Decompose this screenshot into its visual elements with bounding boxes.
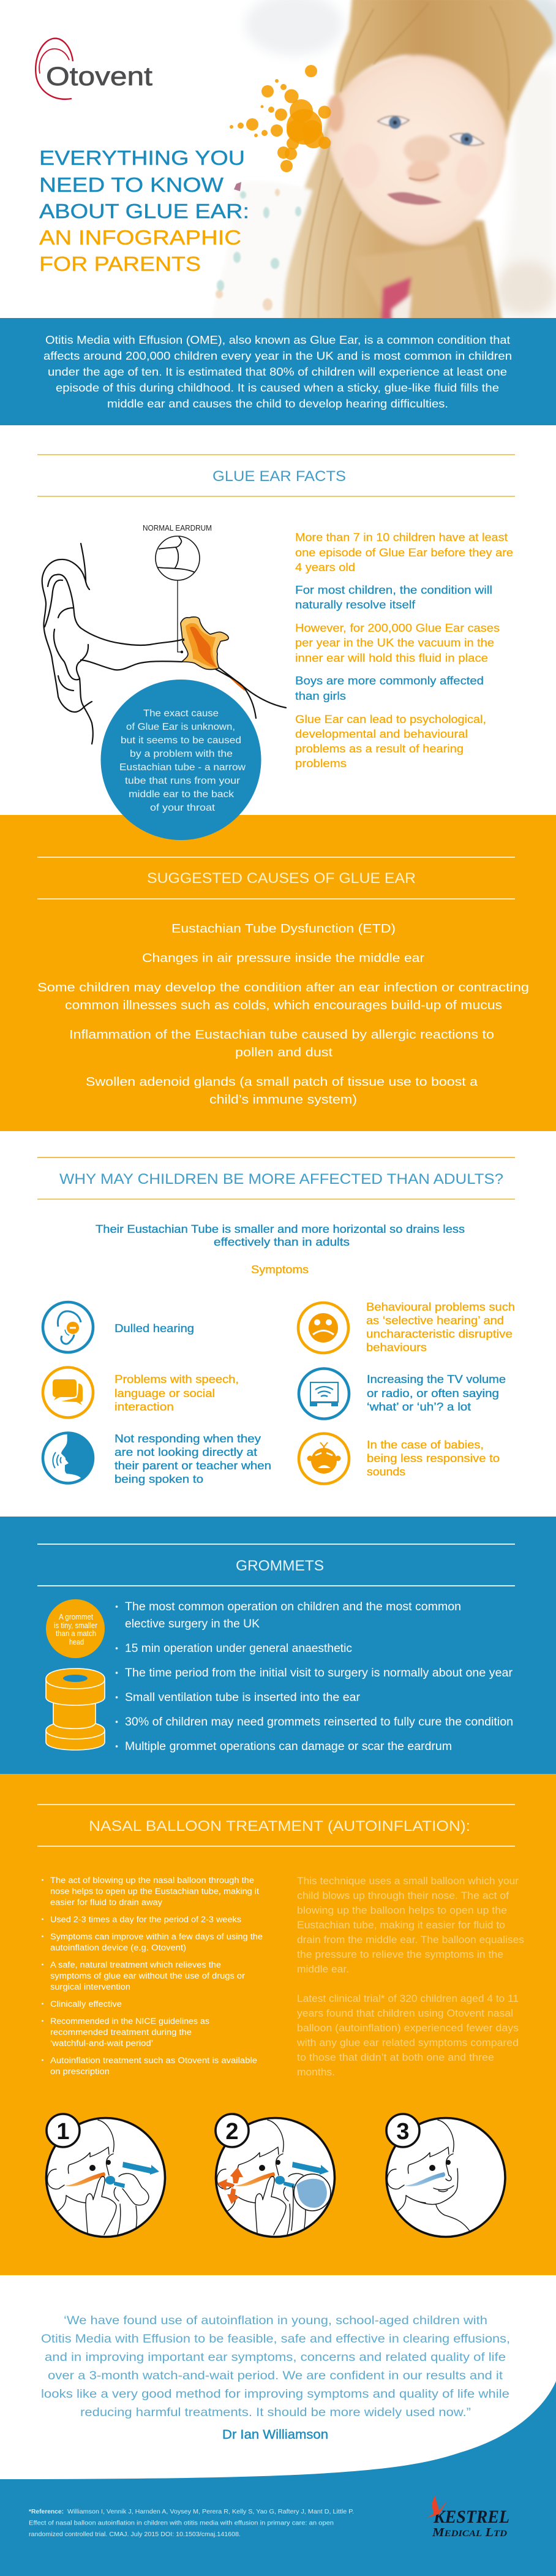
panel: suggested causes: Changes in air pressure inside the middle ear xyxy=(142,952,424,965)
reference text: Williamson I, Vennik J, Harnden A, Voysey M, Perera R, Kelly S, Yao G, Raftery J, Mant D, Little P. xyxy=(67,2508,354,2515)
symptom: babies: sounds xyxy=(367,1466,405,1478)
symptom: speech problems xyxy=(43,1368,239,1418)
logo: Kestrel Medical Ltd: MEDICAL LTD xyxy=(432,2526,507,2539)
callout: grommet size: head xyxy=(69,1638,84,1646)
list: treatment points: Autoinflation treatment such as Otovent is available xyxy=(50,2056,257,2065)
title: FOR PARENTS xyxy=(39,252,201,275)
text block: facts list: For most children, the condition will xyxy=(295,584,492,596)
list: treatment points: symptoms of glue ear without the use of drugs or xyxy=(50,1971,246,1980)
callout: grommet size: than a match xyxy=(56,1629,96,1638)
eardrum magnifier xyxy=(156,536,200,653)
symptom: behavioural problems xyxy=(298,1301,515,1354)
symptom: behavioural problems: Behavioural problems such xyxy=(366,1301,515,1313)
panel: suggested causes: child’s immune system) xyxy=(209,1093,357,1107)
symptom: not responding: are not looking directly at xyxy=(115,1446,257,1458)
reference text: Effect of nasal balloon autoinflation in children with otitis media with effusion in primary care: an open xyxy=(29,2520,334,2527)
text block: technique and clinical trial: This technique uses a small balloon which your xyxy=(297,1876,519,1887)
panel: suggested causes: Inflammation of the Eustachian tube caused by allergic reactions to xyxy=(69,1028,494,1042)
heading: symptoms: Symptoms xyxy=(251,1263,309,1276)
icon: ear with minus xyxy=(43,1302,93,1352)
callout: cause of Glue Ear circle: The exact cause xyxy=(143,708,219,719)
symptom: babies: In the case of babies, xyxy=(367,1439,484,1451)
list: treatment points: Recommended in the NICE guidelines as xyxy=(50,2017,209,2026)
step number 2: 2 xyxy=(225,2119,239,2145)
panel: intro: under the age of ten. It is estimated that 80% of children will experience at least one xyxy=(48,365,507,378)
callout: cause of Glue Ear circle: of Glue Ear is unknown, xyxy=(126,722,235,732)
text block: facts list: problems xyxy=(295,757,347,770)
label: normal eardrum: NORMAL EARDRUM xyxy=(143,523,212,532)
symptom: TV volume: Increasing the TV volume xyxy=(367,1373,506,1385)
symptom: not responding: being spoken to xyxy=(115,1473,203,1485)
panel: suggested causes: SUGGESTED CAUSES OF GLUE EAR xyxy=(147,870,416,887)
text block: technique and clinical trial: balloon (autoinflation) experienced fewer days xyxy=(297,2023,519,2034)
ear outline xyxy=(42,544,184,744)
symptom: babies xyxy=(299,1434,500,1484)
panel: footer xyxy=(0,2381,556,2576)
symptom: TV volume: ‘what’ or ‘uh’? a lot xyxy=(367,1401,471,1413)
symptom: TV volume xyxy=(299,1369,506,1419)
step number 2 xyxy=(216,2114,249,2147)
reference text: randomized controlled trial. CMAJ. July 2015 DOI: 10.1503/cmaj.141608. xyxy=(29,2531,241,2538)
list: grommet facts: 30% of children may need grommets reinserted to fully cure the condition xyxy=(125,1716,513,1729)
list: grommet facts: elective surgery in the UK xyxy=(125,1618,260,1631)
title: AN INFOGRAPHIC xyxy=(39,226,241,249)
heading: why children more affected: WHY MAY CHILDREN BE MORE AFFECTED THAN ADULTS? xyxy=(59,1171,503,1188)
quote: Otitis Media with Effusion to be feasible, safe and effective in clearing effusions, xyxy=(41,2332,510,2346)
text block: Eustachian tube explanation: effectively than in adults xyxy=(214,1236,350,1248)
text block: technique and clinical trial: years found that children using Otovent nasal xyxy=(297,2008,513,2019)
text block: technique and clinical trial xyxy=(296,1876,524,2078)
heading: Glue Ear facts: GLUE EAR FACTS xyxy=(212,468,346,485)
quote: ‘We have found use of autoinflation in young, school-aged children with xyxy=(64,2314,487,2327)
quote: and in improving important ear symptoms, concerns and related quality of life xyxy=(45,2351,506,2364)
text block: technique and clinical trial: blowing up the balloon helps to open up the xyxy=(297,1905,507,1916)
ear diagram xyxy=(42,523,286,744)
list: treatment points: Clinically effective xyxy=(50,1999,122,2009)
text block: Eustachian tube explanation xyxy=(96,1223,465,1248)
step 2 illustration xyxy=(216,2114,334,2237)
step number 1: 1 xyxy=(56,2119,70,2145)
logo: Kestrel Medical Ltd: KESTREL xyxy=(433,2507,509,2527)
text block: facts list: than girls xyxy=(295,690,346,702)
list: treatment points: surgical intervention xyxy=(50,1982,130,1991)
callout: cause of Glue Ear circle xyxy=(100,680,261,840)
list: treatment points: autoinflation device (e.g. Otovent) xyxy=(50,1943,186,1952)
panel: intro: episode of this during childhood. It is caused when a sticky, glue-like fluid fills the xyxy=(56,381,499,394)
list: grommet facts: The most common operation on children and the most common xyxy=(125,1601,461,1613)
panel: nasal balloon treatment xyxy=(0,1774,556,2275)
text block: facts list: naturally resolve itself xyxy=(295,599,416,611)
text block: technique and clinical trial: drain from the middle ear. The balloon equalises xyxy=(297,1934,524,1945)
step number 3 xyxy=(386,2114,419,2147)
text block: technique and clinical trial: child blows up through their nose. The act of xyxy=(297,1890,509,1901)
text block: facts list: More than 7 in 10 children have at least xyxy=(295,531,508,544)
text block: facts list: Boys are more commonly affected xyxy=(295,675,484,687)
list: treatment points: A safe, natural treatment which relieves the xyxy=(50,1960,221,1969)
logo: Kestrel Medical Ltd xyxy=(427,2495,509,2539)
text block: technique and clinical trial: Eustachian tube, making it easier for fluid to xyxy=(297,1920,505,1931)
panel: suggested causes xyxy=(0,815,556,1131)
list: treatment points: recommended treatment during the xyxy=(50,2028,192,2037)
icon: television with sound waves xyxy=(299,1369,349,1419)
text block: facts list: inner ear will hold this fluid in place xyxy=(295,652,488,664)
icon: grommet xyxy=(46,1669,105,1750)
text block: facts list: problems as a result of hearing xyxy=(295,743,464,755)
callout: cause of Glue Ear circle: of your throat xyxy=(150,803,216,813)
title: NEED TO KNOW xyxy=(39,173,224,196)
list: treatment points: Symptoms can improve within a few days of using the xyxy=(50,1932,263,1941)
quote: reducing harmful treatments. It should be more widely used now.” xyxy=(80,2406,471,2419)
list: treatment points: on prescription xyxy=(50,2067,110,2076)
hero photo: child with blonde hair xyxy=(211,0,556,321)
panel: suggested causes: pollen and dust xyxy=(235,1046,333,1059)
quote: looks like a very good method for improving symptoms and quality of life while xyxy=(41,2387,509,2401)
list: treatment points: ‘watchful-and-wait period’ xyxy=(50,2039,153,2048)
list: treatment points: The act of blowing up the nasal balloon through the xyxy=(50,1876,254,1885)
panel: suggested causes: Some children may develop the condition after an ear infection or contracting xyxy=(37,981,529,994)
list: treatment points xyxy=(42,1876,263,2076)
text block: facts list: 4 years old xyxy=(295,561,355,574)
title xyxy=(39,146,249,275)
text block: facts list: developmental and behavioural xyxy=(295,728,468,740)
list: grommet facts: Multiple grommet operations can damage or scar the eardrum xyxy=(125,1740,452,1753)
step number 3: 3 xyxy=(396,2119,410,2145)
orange dots burst xyxy=(230,65,331,172)
list: treatment points: Used 2-3 times a day for the period of 2-3 weeks xyxy=(50,1915,241,1924)
list: grommet facts: The time period from the initial visit to surgery is normally about one year xyxy=(125,1667,513,1680)
title: ABOUT GLUE EAR: xyxy=(39,200,249,222)
text block: technique and clinical trial: Latest clinical trial* of 320 children aged 4 to 11 xyxy=(297,1993,519,2004)
step 1 illustration xyxy=(47,2114,165,2237)
symptom: behavioural problems: as ‘selective hearing’ and xyxy=(366,1314,504,1327)
symptom: speech problems: interaction xyxy=(115,1401,174,1413)
text block: technique and clinical trial: to those that didn’t at both one and three xyxy=(297,2052,494,2063)
balloon xyxy=(291,2174,331,2230)
quote: over a 3-month watch-and-wait period. We are confident in our results and it xyxy=(48,2369,503,2382)
text block: facts list xyxy=(295,531,513,770)
callout: grommet size: is tiny, smaller xyxy=(54,1621,97,1630)
panel: suggested causes: common illnesses such as colds, which encourages build-up of mucus xyxy=(65,999,502,1012)
text block: Eustachian tube explanation: Their Eustachian Tube is smaller and more horizontal so drains less xyxy=(96,1223,465,1235)
text block: technique and clinical trial: months. xyxy=(297,2067,335,2078)
reference text xyxy=(29,2508,354,2538)
symptom: behavioural problems: uncharacteristic disruptive xyxy=(366,1328,513,1340)
symptom: not responding: Not responding when they xyxy=(115,1433,261,1445)
callout: cause of Glue Ear circle: but it seems to be caused xyxy=(121,735,241,746)
icon: speaking head xyxy=(43,1433,94,1483)
quote xyxy=(41,2314,510,2442)
symptom: behavioural problems: behaviours xyxy=(366,1341,427,1354)
text block: facts list: per year in the UK the vacuum in the xyxy=(295,637,494,649)
symptom: not responding xyxy=(43,1433,271,1485)
list: grommet facts xyxy=(116,1601,513,1753)
step number 1 xyxy=(47,2114,80,2147)
panel: intro: affects around 200,000 children every year in the UK and is most common in children xyxy=(43,349,512,362)
callout: cause of Glue Ear circle: Eustachian tube - a narrow xyxy=(119,762,246,773)
middle ear fluid xyxy=(181,617,286,718)
icon: crying baby xyxy=(299,1434,349,1484)
symptom: speech problems: language or social xyxy=(115,1387,215,1400)
symptom: dulled hearing xyxy=(43,1302,194,1352)
panel: suggested causes: Swollen adenoid glands (a small patch of tissue use to boost a xyxy=(86,1075,478,1089)
logo: Otovent: Otovent xyxy=(46,62,152,91)
text block: technique and clinical trial: with any glue ear related symptoms compared xyxy=(296,2037,519,2048)
pressure arrows xyxy=(217,2167,243,2204)
symptom: babies: being less responsive to xyxy=(367,1452,500,1464)
panel: intro: Otitis Media with Effusion (OME), also known as Glue Ear, is a common condition that xyxy=(45,333,510,346)
quote attribution: Dr Ian Williamson xyxy=(222,2428,328,2442)
symptom: not responding: their parent or teacher when xyxy=(115,1460,271,1472)
list: grommet facts: 15 min operation under general anaesthetic xyxy=(125,1642,352,1655)
title: EVERYTHING YOU xyxy=(39,146,245,169)
reference text: *Reference: xyxy=(29,2508,64,2515)
text block: facts list: However, for 200,000 Glue Ear cases xyxy=(295,622,500,634)
list: treatment points: nose helps to open up the Eustachian tube, making it xyxy=(50,1887,259,1896)
text block: facts list: Glue Ear can lead to psychological, xyxy=(295,713,486,725)
step 3 illustration xyxy=(386,2114,505,2237)
callout: cause of Glue Ear circle: by a problem with the xyxy=(130,749,233,759)
callout: grommet size: A grommet xyxy=(59,1613,93,1621)
list: treatment points: easier for fluid to drain away xyxy=(50,1898,162,1907)
icon: speech bubbles xyxy=(43,1368,93,1418)
panel: intro xyxy=(0,318,556,425)
text block: technique and clinical trial: middle ear. xyxy=(297,1964,349,1975)
text block: technique and clinical trial: the pressure to relieve the symptoms in the xyxy=(297,1949,503,1960)
callout: cause of Glue Ear circle: middle ear to the back xyxy=(129,789,235,800)
panel: nasal balloon treatment: NASAL BALLOON TREATMENT (AUTOINFLATION): xyxy=(89,1818,470,1835)
panel: intro: middle ear and causes the child to develop hearing difficulties. xyxy=(107,397,448,410)
list: grommet facts: Small ventilation tube is inserted into the ear xyxy=(125,1691,361,1704)
panel: grommets: GROMMETS xyxy=(236,1558,324,1574)
panel: suggested causes: Eustachian Tube Dysfunction (ETD) xyxy=(171,922,396,936)
symptom: TV volume: or radio, or often saying xyxy=(367,1387,499,1400)
symptom: dulled hearing: Dulled hearing xyxy=(115,1322,194,1335)
panel: grommets xyxy=(0,1517,556,1774)
symptom: speech problems: Problems with speech, xyxy=(115,1373,239,1385)
callout: grommet size xyxy=(46,1599,105,1658)
logo: Otovent xyxy=(36,39,152,99)
icon: sad face xyxy=(298,1303,348,1353)
text block: facts list: one episode of Glue Ear before they are xyxy=(295,547,513,559)
callout: cause of Glue Ear circle: tube that runs from your xyxy=(125,776,241,786)
